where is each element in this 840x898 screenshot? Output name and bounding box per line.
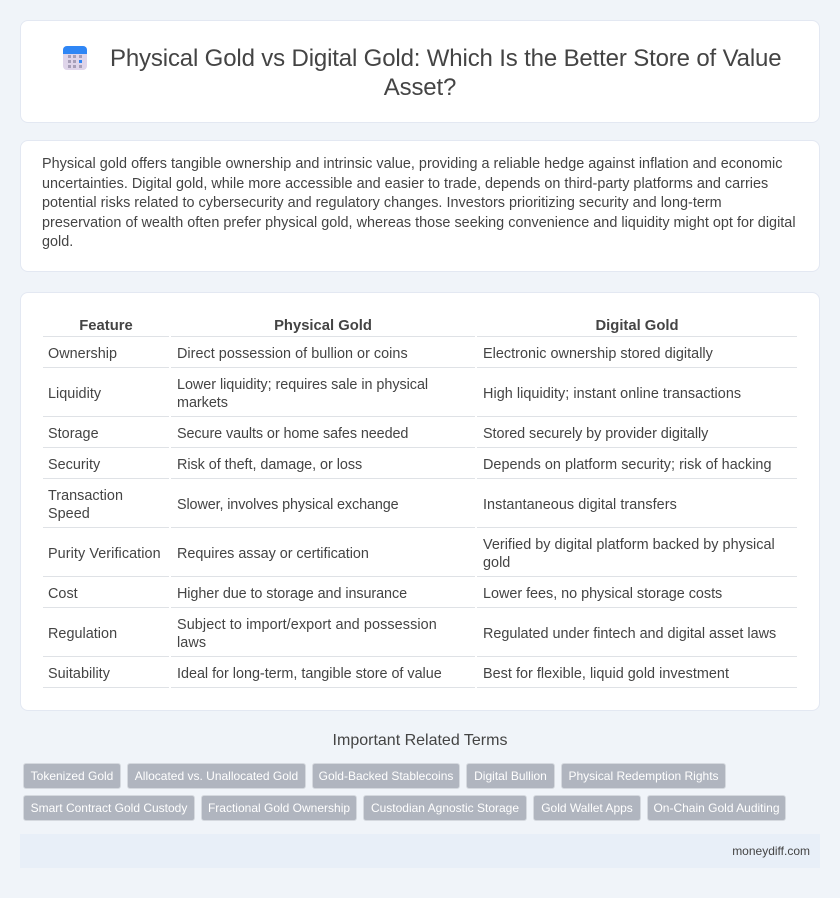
storage digital: Stored securely by provider digitally — [483, 426, 708, 442]
transaction digital: Instantaneous digital transfers — [483, 497, 677, 513]
regulation physical — [177, 617, 437, 651]
footer source: moneydiff.com — [732, 844, 810, 858]
liquidity physical: Lower liquidity; requires sale in physical — [177, 377, 428, 393]
title: Asset? — [384, 74, 456, 101]
tag — [647, 795, 786, 821]
liquidity physical: markets — [177, 395, 228, 411]
tag — [312, 763, 460, 789]
tag: Gold Wallet Apps — [541, 801, 633, 815]
intro text: uncertainties. Digital gold, while more accessible and easier to trade, depends on third-party platforms and carries — [42, 176, 768, 192]
suitability physical: Ideal for long-term, tangible store of value — [177, 666, 442, 682]
ownership physical: Direct possession of bullion or coins — [177, 346, 408, 362]
tag: Physical Redemption Rights — [568, 769, 719, 783]
related terms heading: Important Related Terms — [333, 732, 507, 749]
intro text: preservation of wealth often prefer physical gold, whereas those seeking convenience and liquidity might opt for digital — [42, 214, 796, 230]
tag — [363, 795, 527, 821]
intro text: potential risks related to cybersecurity and regulatory changes. Investors prioritizing security and long-term — [42, 195, 722, 211]
footer bar — [20, 834, 820, 868]
intro panel — [20, 140, 820, 272]
row: storage: Storage — [48, 426, 99, 442]
row: ownership: Ownership — [48, 346, 117, 362]
regulation physical: Subject to import/export and possession — [177, 617, 437, 633]
purity digital: gold — [483, 555, 510, 571]
row: suitability: Suitability — [48, 666, 110, 682]
purity physical: Requires assay or certification — [177, 546, 369, 562]
row: purity verification: Purity Verification — [48, 546, 161, 562]
tag: Custodian Agnostic Storage — [371, 801, 519, 815]
intro text: gold. — [42, 234, 73, 250]
cost digital: Lower fees, no physical storage costs — [483, 586, 722, 602]
row: cost: Cost — [48, 586, 78, 602]
transaction physical: Slower, involves physical exchange — [177, 497, 398, 513]
row: transaction speed — [48, 488, 123, 522]
table header: physical gold: Physical Gold — [274, 318, 372, 334]
tag: Gold-Backed Stablecoins — [319, 769, 453, 783]
tag — [23, 795, 195, 821]
title: Physical Gold vs Digital Gold: Which Is the Better Store of Value — [110, 45, 781, 72]
cost physical: Higher due to storage and insurance — [177, 586, 407, 602]
row: security: Security — [48, 457, 100, 473]
tag: Tokenized Gold — [31, 769, 113, 783]
liquidity physical — [177, 377, 428, 411]
tag — [533, 795, 641, 821]
title panel — [20, 20, 820, 123]
table header: digital gold: Digital Gold — [595, 318, 679, 334]
tag: Smart Contract Gold Custody — [31, 801, 187, 815]
tag — [201, 795, 357, 821]
title — [110, 45, 781, 101]
tag — [23, 763, 121, 789]
intro text — [42, 156, 796, 250]
suitability digital: Best for flexible, liquid gold investment — [483, 666, 729, 682]
tag: On-Chain Gold Auditing — [653, 801, 780, 815]
purity digital — [483, 537, 775, 571]
tag — [127, 763, 306, 789]
tag: Fractional Gold Ownership — [208, 801, 350, 815]
ownership digital: Electronic ownership stored digitally — [483, 346, 713, 362]
comparison table panel — [20, 292, 820, 711]
tag — [561, 763, 726, 789]
icon: calendar — [63, 46, 87, 70]
security digital: Depends on platform security; risk of hacking — [483, 457, 772, 473]
regulation physical: laws — [177, 635, 206, 651]
intro text: Physical gold offers tangible ownership and intrinsic value, providing a reliable hedge against inflation and economic — [42, 156, 782, 172]
liquidity digital: High liquidity; instant online transactions — [483, 386, 741, 402]
tag: Digital Bullion — [474, 769, 547, 783]
tag — [466, 763, 555, 789]
regulation digital: Regulated under fintech and digital asset laws — [483, 626, 776, 642]
security physical: Risk of theft, damage, or loss — [177, 457, 362, 473]
purity digital: Verified by digital platform backed by physical — [483, 537, 775, 553]
table header: feature: Feature — [79, 318, 133, 334]
storage physical: Secure vaults or home safes needed — [177, 426, 408, 442]
row: transaction speed: Speed — [48, 506, 90, 522]
tag: Allocated vs. Unallocated Gold — [135, 769, 298, 783]
row: transaction speed: Transaction — [48, 488, 123, 504]
row: liquidity: Liquidity — [48, 386, 101, 402]
row: regulation: Regulation — [48, 626, 117, 642]
